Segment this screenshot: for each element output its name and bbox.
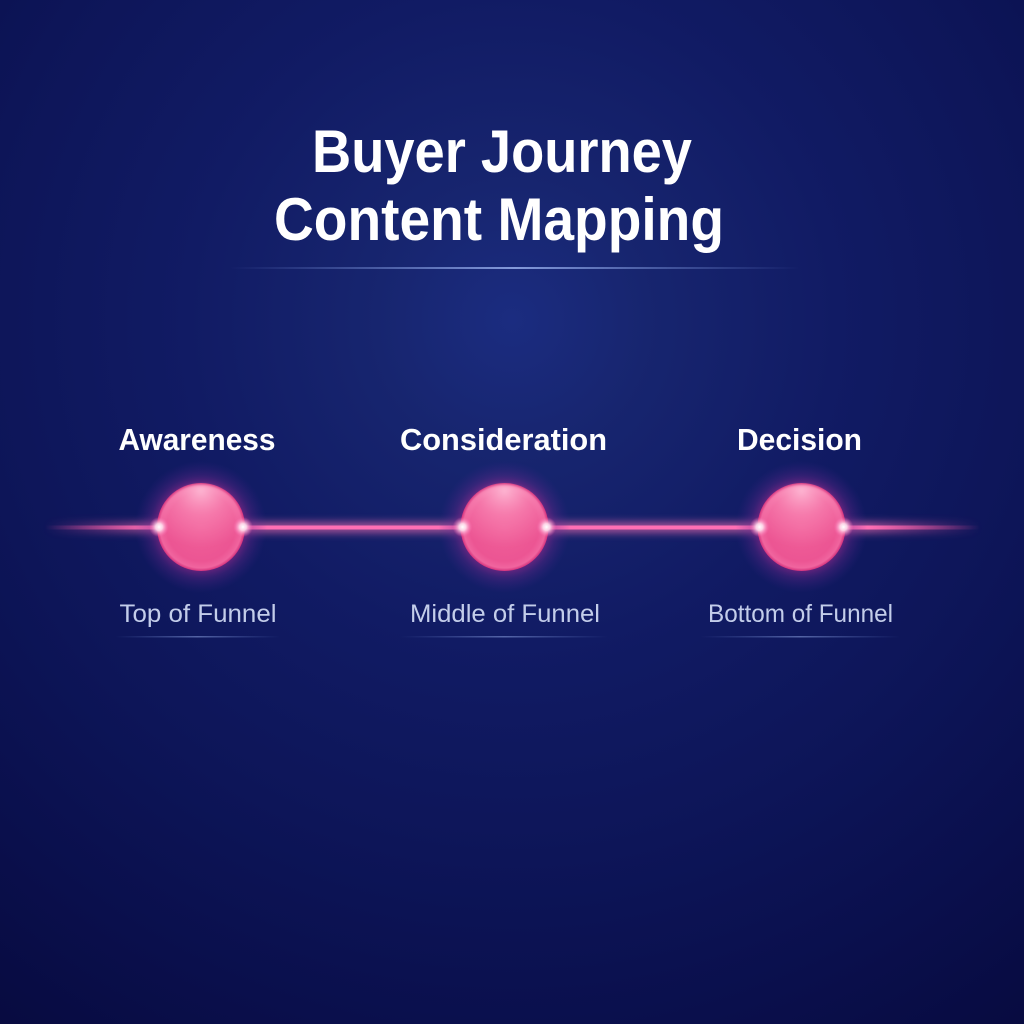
timeline line (45, 522, 980, 533)
title underline (230, 267, 800, 269)
stage sublabels: Middle of Funnel (410, 600, 600, 628)
node: decision (736, 461, 868, 593)
stage sublabels: Bottom of Funnel (708, 600, 893, 628)
stage headings: Decision (737, 422, 862, 457)
title (274, 118, 724, 253)
node: consideration (438, 461, 570, 593)
sublabel underlines (115, 636, 900, 638)
title: Buyer Journey (312, 118, 693, 185)
stage headings: Awareness (118, 422, 276, 457)
stage headings (118, 422, 862, 457)
stage headings: Consideration (400, 422, 607, 457)
stage sublabels: Top of Funnel (120, 600, 276, 628)
stage sublabels (120, 600, 893, 628)
node: awareness (135, 461, 267, 593)
title: Content Mapping (274, 186, 724, 253)
